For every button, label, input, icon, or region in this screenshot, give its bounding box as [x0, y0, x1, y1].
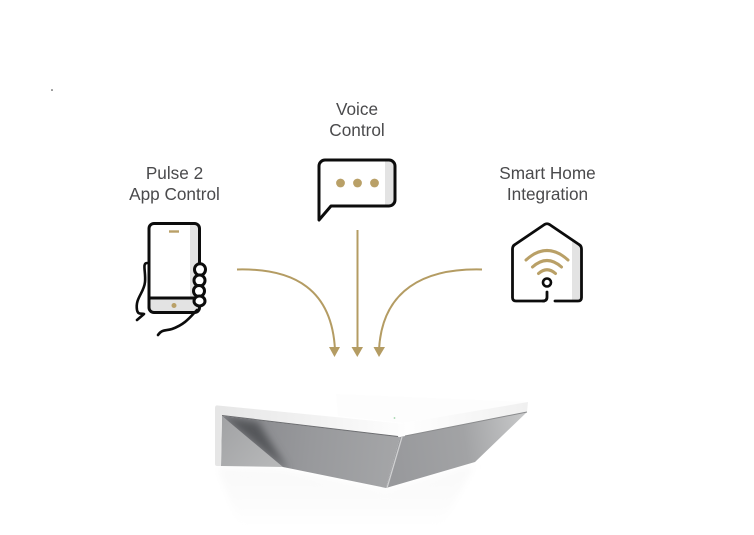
icon: speech bubble: [319, 160, 395, 220]
device left side panel: [221, 416, 284, 467]
label: Pulse 2 App Control: App Control: [129, 184, 220, 204]
device dark shadow along diagonal: [222, 416, 288, 470]
arrow: home to hub: [374, 269, 482, 357]
device front right face: [386, 412, 527, 488]
label: Pulse 2 App Control: Pulse 2: [146, 163, 203, 183]
device white rim: [215, 402, 528, 466]
label: Smart Home Integration: Integration: [507, 184, 588, 204]
device front left face: [222, 416, 400, 488]
arrow: voice to hub: [352, 230, 363, 357]
device top surface: [336, 394, 528, 423]
label: Voice Control: Voice: [336, 99, 378, 119]
icon: phone in hand: [137, 224, 206, 335]
label: Smart Home Integration: Smart Home: [499, 163, 596, 183]
device: Pulse 2 hub: [215, 402, 528, 488]
device reflection: [218, 465, 474, 530]
arrow: phone to hub: [237, 269, 340, 357]
label: Voice Control: Control: [329, 120, 385, 140]
icon: smart home: [512, 224, 582, 301]
small dot mark: [51, 89, 53, 91]
